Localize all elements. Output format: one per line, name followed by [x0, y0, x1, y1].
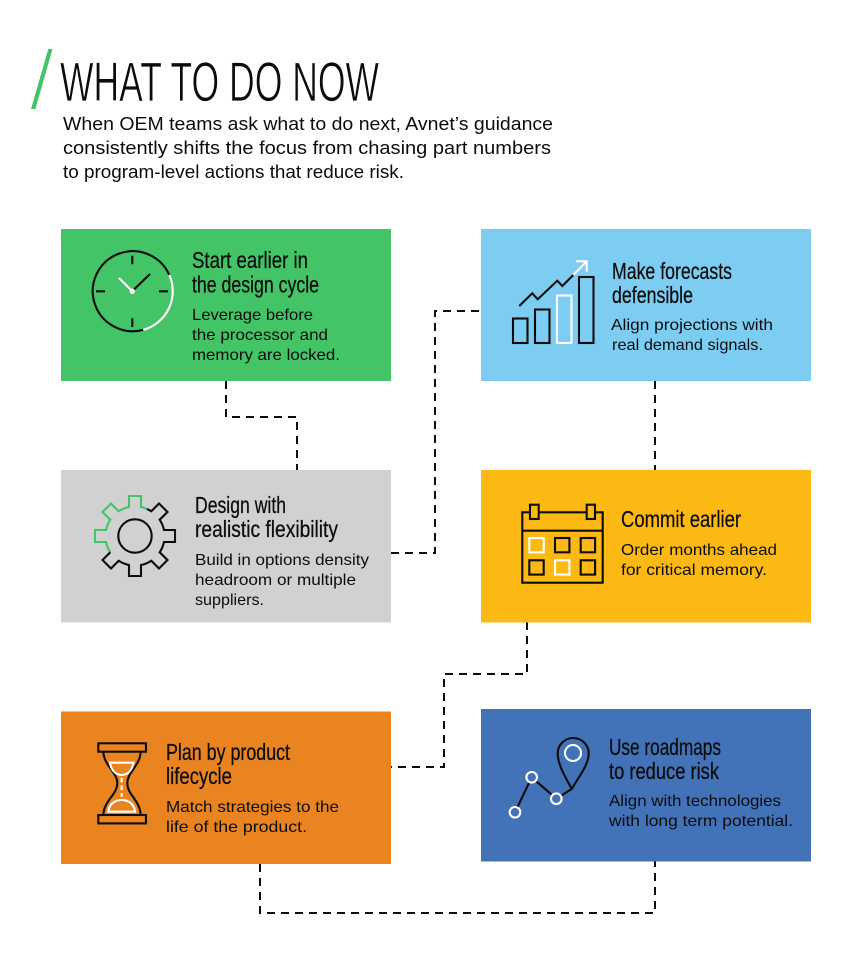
heading: make forecasts: Make forecasts — [612, 258, 732, 284]
body: product lifecycle: Match strategies to the — [166, 799, 339, 816]
panel: commit earlier — [481, 470, 811, 622]
heading: start earlier: Start earlier in — [192, 247, 308, 273]
body: commit earlier — [621, 542, 777, 579]
heading: start earlier: the design cycle — [192, 272, 319, 298]
panel: make forecasts — [481, 229, 811, 381]
icon: bar chart with arrow — [513, 261, 594, 343]
heading: use roadmaps: to reduce risk — [609, 758, 719, 784]
panel: start earlier — [61, 229, 391, 381]
panel: use roadmaps — [481, 709, 811, 862]
body: use roadmaps: Align with technologies — [609, 793, 781, 810]
intro text: When OEM teams ask what to do next, Avnet’s guidance — [63, 113, 553, 134]
icon: map route with pin — [510, 738, 589, 818]
heading: product lifecycle: Plan by product — [166, 739, 290, 765]
body: product lifecycle — [166, 799, 339, 836]
body: commit earlier: Order months ahead — [621, 542, 777, 559]
heading: product lifecycle — [166, 739, 290, 789]
connector: design cycle to flexibility — [226, 381, 297, 470]
icon: clock — [93, 251, 173, 331]
connector: flexibility to forecasts — [391, 311, 481, 553]
connector: lifecycle to roadmaps — [260, 861, 655, 913]
body: design flexibility: suppliers. — [195, 592, 264, 609]
body: design flexibility — [195, 552, 369, 609]
panel: product lifecycle — [61, 712, 391, 864]
heading: make forecasts — [612, 258, 732, 308]
icon: gear — [95, 496, 175, 576]
connector: forecasts to commit — [654, 381, 656, 470]
heading: design flexibility — [195, 492, 338, 542]
body: make forecasts: Align projections with — [611, 317, 773, 334]
heading: make forecasts: defensible — [612, 282, 693, 308]
heading: product lifecycle: lifecycle — [166, 763, 232, 789]
body: start earlier: the processor and — [192, 327, 328, 344]
title: WHAT TO DO NOW — [60, 50, 379, 113]
body: start earlier — [192, 307, 340, 364]
heading: commit earlier: Commit earlier — [621, 506, 741, 532]
heading: design flexibility: Design with — [195, 492, 286, 518]
body: start earlier: Leverage before — [192, 307, 313, 324]
icon: calendar — [522, 505, 603, 583]
body: design flexibility: headroom or multiple — [195, 572, 356, 589]
body: product lifecycle: life of the product. — [166, 819, 307, 836]
body: commit earlier: for critical memory. — [621, 562, 767, 579]
heading: use roadmaps: Use roadmaps — [609, 734, 721, 760]
heading: design flexibility: realistic flexibility — [195, 516, 338, 542]
intro text — [63, 113, 553, 182]
connector: commit to lifecycle — [391, 622, 527, 767]
body: design flexibility: Build in options density — [195, 552, 369, 569]
intro text: to program-level actions that reduce risk. — [63, 161, 404, 182]
title accent slash — [31, 49, 52, 109]
body: make forecasts: real demand signals. — [612, 337, 763, 354]
panel: design flexibility — [61, 470, 391, 622]
heading: start earlier — [192, 247, 319, 298]
body: use roadmaps — [608, 793, 793, 830]
heading: use roadmaps — [609, 734, 721, 784]
body: start earlier: memory are locked. — [192, 347, 340, 364]
body: make forecasts — [611, 317, 773, 354]
intro text: consistently shifts the focus from chasing part numbers — [63, 137, 551, 158]
body: use roadmaps: with long term potential. — [608, 813, 793, 830]
icon: hourglass — [98, 743, 146, 823]
